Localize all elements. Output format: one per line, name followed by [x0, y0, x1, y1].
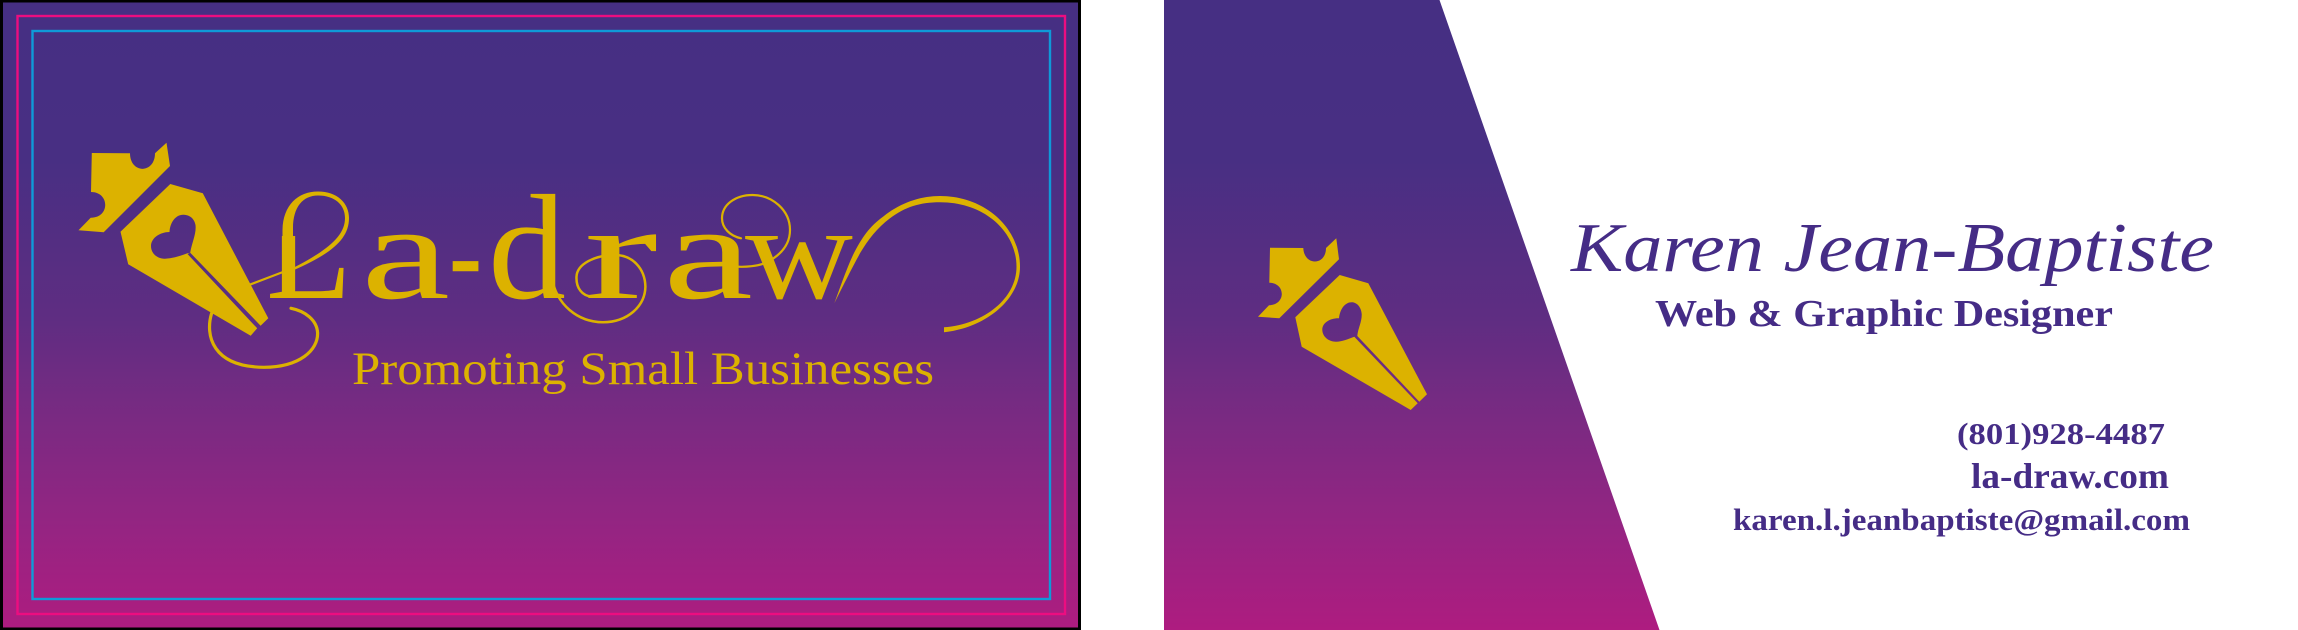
tagline: Promoting Small Businesses — [352, 343, 934, 395]
icon: fountain pen — [1258, 238, 1427, 410]
job title: Web & Graphic Designer — [1655, 293, 2113, 335]
name: Karen Jean-Baptiste — [1570, 210, 2214, 287]
card background with black border — [2, 1, 1080, 629]
logo wordmark — [270, 194, 852, 300]
logo wordmark: L — [266, 155, 352, 333]
logo flourishes — [210, 192, 1020, 367]
website: la-draw.com — [1971, 456, 2169, 496]
logo wordmark: a — [663, 179, 753, 328]
blue safe-area guide — [32, 31, 1050, 599]
gradient wedge — [1164, 0, 1660, 630]
logo wordmark: d — [488, 165, 566, 331]
logo wordmark: a — [361, 179, 450, 328]
phone number: (801)928-4487 — [1957, 416, 2165, 451]
panel: card back — [1164, 0, 2214, 630]
logo wordmark: - — [449, 179, 482, 328]
pink bleed guide — [18, 16, 1065, 614]
panel: card front — [2, 1, 1080, 629]
email: karen.l.jeanbaptiste@gmail.com — [1733, 502, 2190, 537]
logo wordmark: r — [584, 179, 658, 328]
icon: fountain pen logo — [78, 143, 268, 336]
logo wordmark: w — [745, 179, 853, 328]
